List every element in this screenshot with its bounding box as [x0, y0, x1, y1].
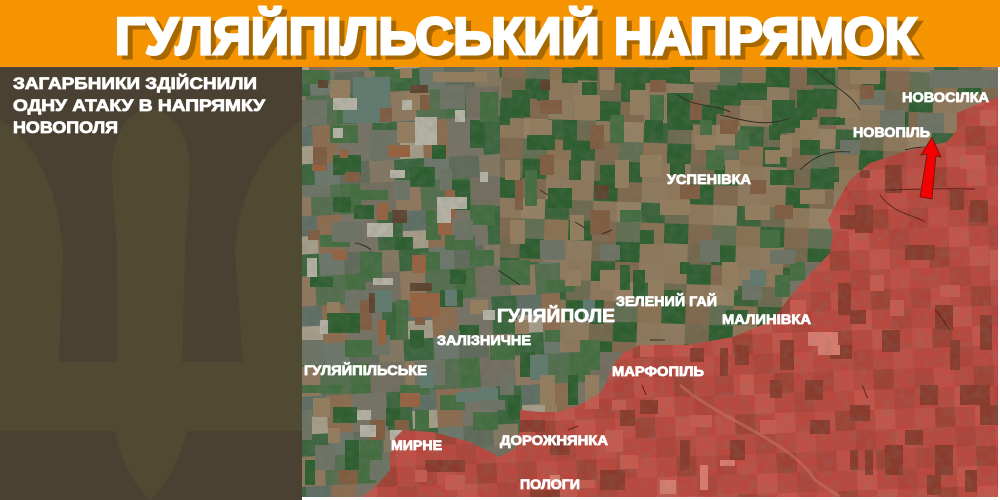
panel: left text panel with trident [0, 67, 302, 500]
red occupied territory [340, 90, 1000, 500]
map labels: settlements: УСПЕНІВКА [667, 171, 751, 187]
map labels: settlements: НОВОПІЛЬ [853, 124, 930, 140]
text block: attack summary: НОВОПОЛЯ [13, 118, 118, 137]
arrow: attack direction [920, 137, 941, 199]
map labels: settlements: ЗЕЛЕНИЙ ГАЙ [616, 292, 717, 309]
icon: trident emblem [0, 110, 302, 500]
text block: attack summary: ОДНУ АТАКУ В НАПРЯМКУ [13, 96, 265, 115]
map labels: settlements: ЗАЛІЗНИЧНЕ [437, 332, 531, 348]
map labels: settlements: ПОЛОГИ [520, 476, 580, 492]
text block: attack summary: ЗАГАРБНИКИ ЗДІЙСНИЛИ [13, 74, 257, 93]
title shadow: ГУЛЯЙПІЛЬСЬКИЙ НАПРЯМОК [120, 11, 922, 70]
panel: satellite map [302, 67, 1000, 500]
map labels: settlements: ГУЛЯЙПОЛЕ [497, 305, 615, 326]
map labels: settlements: МАРФОПІЛЬ [612, 363, 704, 379]
header bar [0, 0, 1000, 67]
map labels: settlements: ГУЛЯЙПІЛЬСЬКЕ [304, 361, 427, 378]
map labels: settlements: ДОРОЖНЯНКА [500, 432, 608, 448]
map texture [302, 67, 998, 497]
map terrain: farm fields [302, 67, 998, 497]
map labels: settlements: НОВОСІЛКА [902, 89, 989, 105]
terrain darkening [302, 67, 998, 497]
map labels: settlements: МИРНЕ [391, 437, 442, 453]
title: ГУЛЯЙПІЛЬСЬКИЙ НАПРЯМОК [115, 7, 917, 66]
map labels: settlements: МАЛИНІВКА [722, 311, 811, 327]
text block: attack summary [13, 74, 265, 137]
map labels: settlements [304, 89, 989, 492]
